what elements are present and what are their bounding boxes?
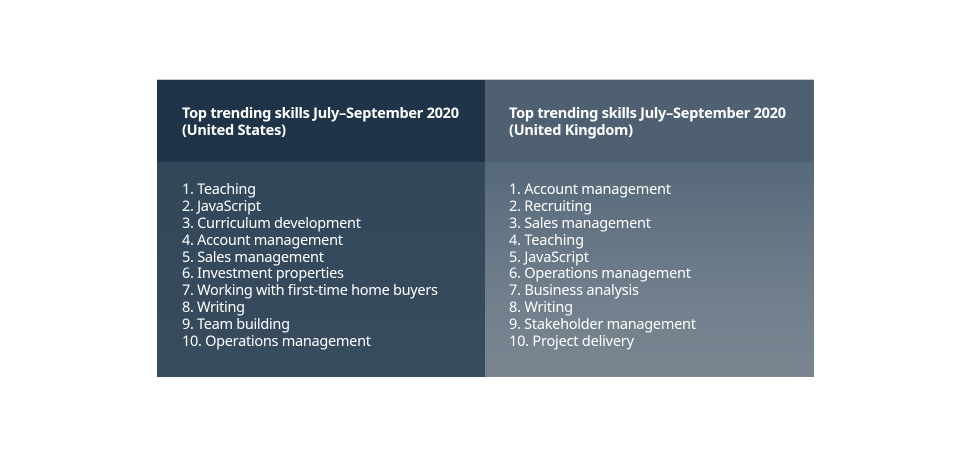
panel header background: United States [157, 80, 485, 162]
heading: United Kingdom [509, 103, 786, 140]
list: United States skills: 1. Teaching [182, 179, 256, 199]
list: United Kingdom skills: 6. Operations management [509, 263, 691, 283]
list: United Kingdom skills: 5. JavaScript [509, 247, 589, 267]
list: United Kingdom skills: 1. Account management [509, 179, 671, 199]
list: United Kingdom skills: 10. Project delivery [509, 331, 635, 351]
list: United States skills: 8. Writing [182, 297, 245, 317]
panel header background: United Kingdom [485, 80, 814, 162]
panel: United States [157, 80, 485, 377]
list: United Kingdom skills: 9. Stakeholder management [509, 314, 696, 334]
list: United States skills: 7. Working with first-time home buyers [182, 280, 438, 300]
list: United States skills: 3. Curriculum development [182, 213, 361, 233]
list: United Kingdom skills: 3. Sales management [509, 213, 651, 233]
list: United States skills: 6. Investment properties [182, 263, 344, 283]
list: United States skills: 2. JavaScript [182, 196, 261, 216]
list: United States skills: 4. Account management [182, 230, 343, 250]
heading: United States: (United States) [182, 120, 286, 140]
heading: United States [182, 103, 459, 140]
heading: United States: Top trending skills July–September 2020 [182, 103, 459, 123]
panel body background: United States [157, 162, 485, 377]
list: United Kingdom skills: 7. Business analysis [509, 280, 639, 300]
panel: United Kingdom [485, 80, 814, 377]
list: United States skills [182, 179, 438, 351]
list: United States skills: 10. Operations management [182, 331, 371, 351]
list: United Kingdom skills [509, 179, 696, 351]
list: United States skills: 9. Team building [182, 314, 290, 334]
list: United Kingdom skills: 8. Writing [509, 297, 573, 317]
heading: United Kingdom: (United Kingdom) [509, 120, 633, 140]
heading: United Kingdom: Top trending skills July–September 2020 [509, 103, 786, 123]
panel body background: United Kingdom [485, 162, 814, 377]
list: United Kingdom skills: 2. Recruiting [509, 196, 592, 216]
list: United States skills: 5. Sales management [182, 247, 324, 267]
list: United Kingdom skills: 4. Teaching [509, 230, 584, 250]
